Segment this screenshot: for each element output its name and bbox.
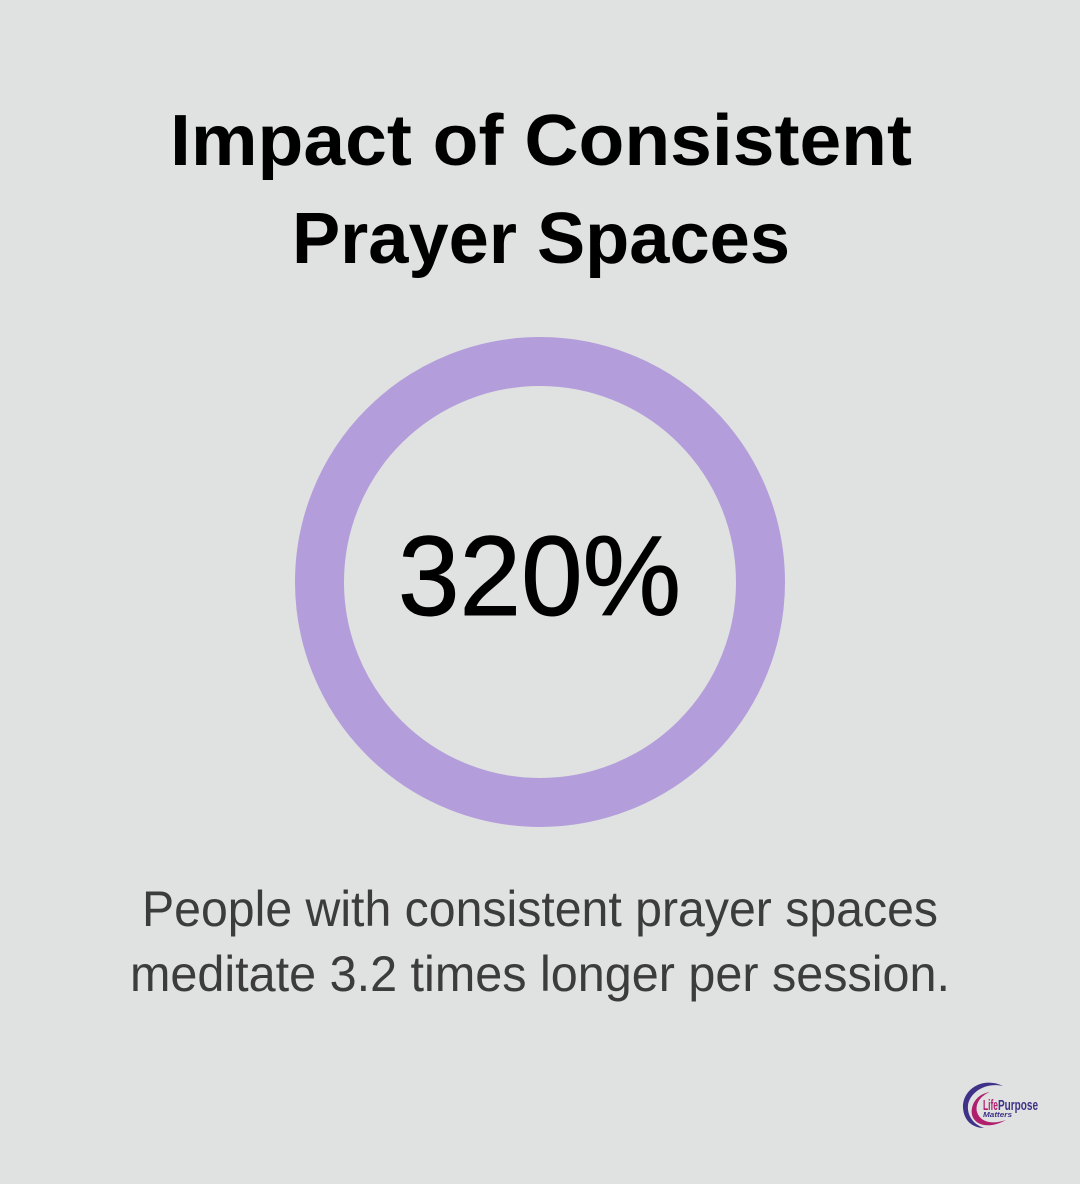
title: Prayer Spaces — [292, 199, 790, 279]
title: Impact of Consistent — [170, 101, 912, 181]
logo inner arc — [972, 1092, 1006, 1125]
logo: Life Purpose Matters — [963, 1083, 1038, 1128]
donut ring — [320, 362, 760, 802]
logo: Life Purpose Matters: Purpose — [998, 1097, 1038, 1114]
statistic value: 320% — [398, 513, 681, 639]
title — [170, 101, 912, 279]
description text: People with consistent prayer spaces — [142, 881, 938, 937]
description text — [130, 881, 950, 1002]
description text: meditate 3.2 times longer per session. — [130, 946, 950, 1002]
logo: Life Purpose Matters: Matters — [983, 1112, 1012, 1119]
logo wordmark: Life — [983, 1097, 998, 1114]
logo outer arc — [963, 1083, 1003, 1128]
